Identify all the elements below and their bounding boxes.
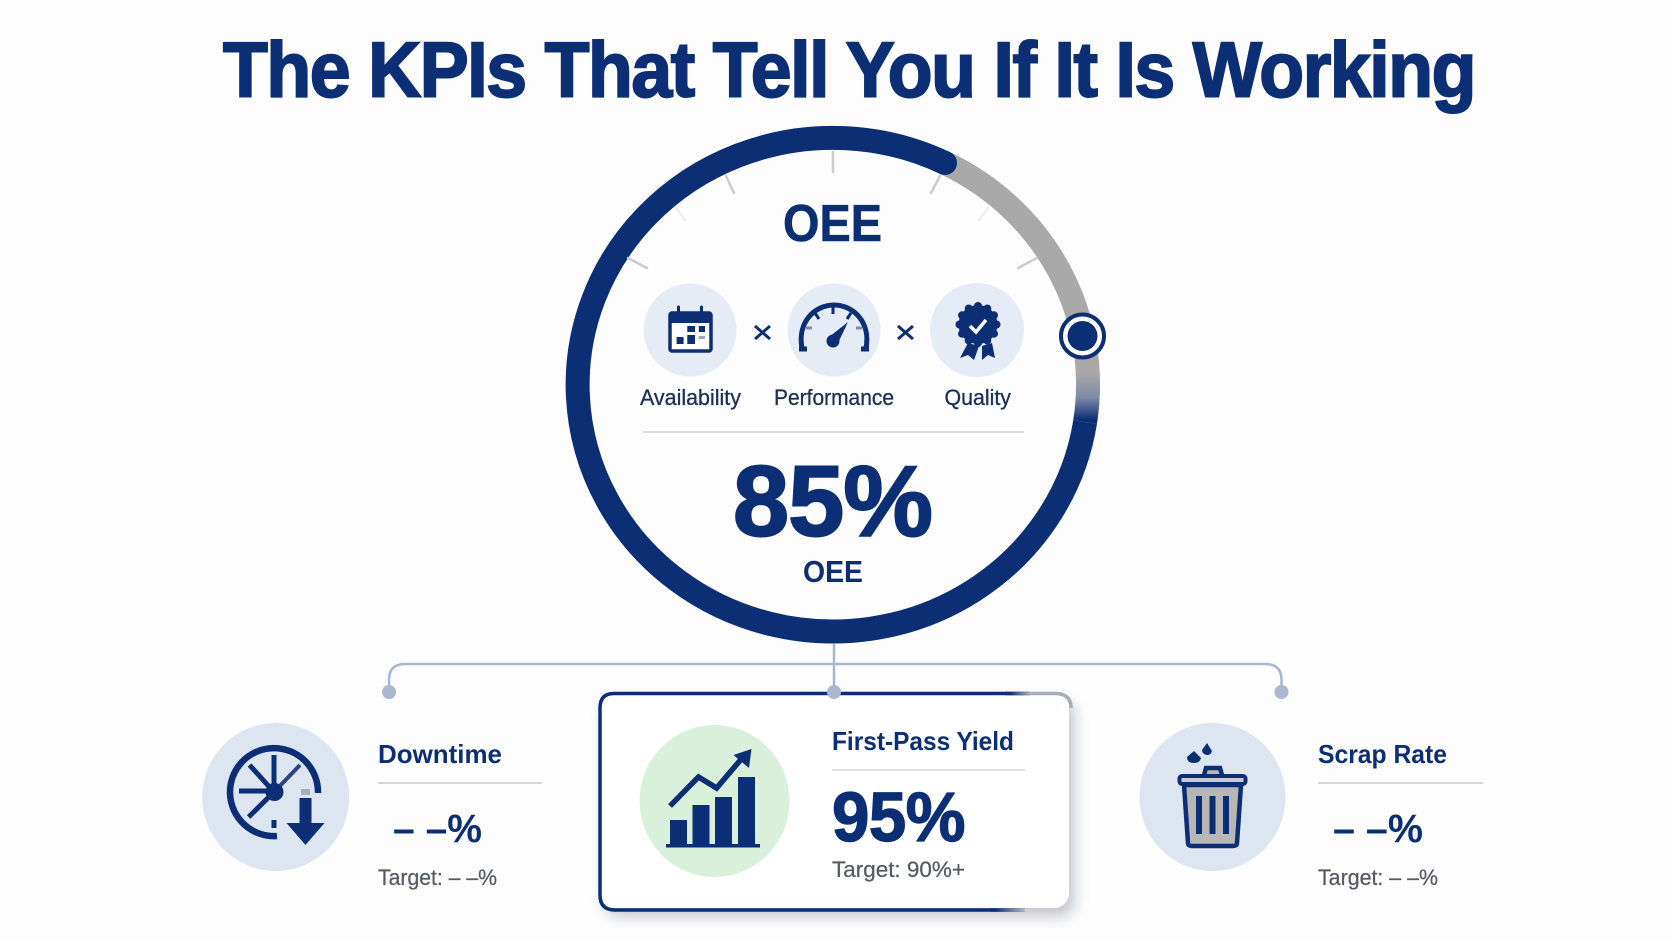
target: scrap rate: Target: – –% [1318,865,1438,890]
factor: performance [774,284,894,410]
value: scrap rate: – –% [1333,807,1423,851]
icon: speedometer [788,284,880,376]
gauge marker [1061,314,1104,358]
connector lines [389,644,1282,692]
gauge tick marks [628,152,1037,268]
factor: availability [640,284,741,410]
heading: first-pass yield: First-Pass Yield [832,726,1014,756]
value: downtime: – –% [393,807,482,851]
value: 95%: 95% [832,778,965,856]
icon: award badge [930,283,1024,377]
icon: growth chart [640,725,790,877]
icon: downtime clock [202,723,349,871]
KPI: downtime [202,723,542,890]
label: quality: Quality [944,385,1011,410]
label: availability: Availability [640,385,741,410]
ring: rounded progress end [933,151,957,175]
KPI: scrap rate [1140,723,1483,890]
icon: calendar [644,284,736,376]
target: first-pass yield: Target: 90%+ [832,857,965,882]
title: The KPIs That Tell You If It Is Working [223,26,1475,114]
connector dots [382,685,1288,699]
card: first-pass yield [600,693,1071,910]
OEE gauge ring [578,138,1088,631]
card background [600,693,1069,908]
icon: trash can [1140,723,1286,871]
heading: downtime: Downtime [378,739,502,769]
ring: navy progress arc [578,138,1085,631]
ring: remaining gray arc [945,163,1088,422]
target: downtime: Target: – –% [378,865,497,890]
heading: OEE: OEE [783,195,882,253]
multiply sign [898,326,913,339]
value: 85%: 85% [733,446,932,558]
heading: scrap rate: Scrap Rate [1318,739,1447,769]
label: performance: Performance [774,385,894,410]
card border [600,694,1071,910]
label: OEE value caption: OEE [803,554,863,589]
divider [643,431,1024,433]
multiply sign [755,326,770,339]
factor: quality [930,283,1024,410]
